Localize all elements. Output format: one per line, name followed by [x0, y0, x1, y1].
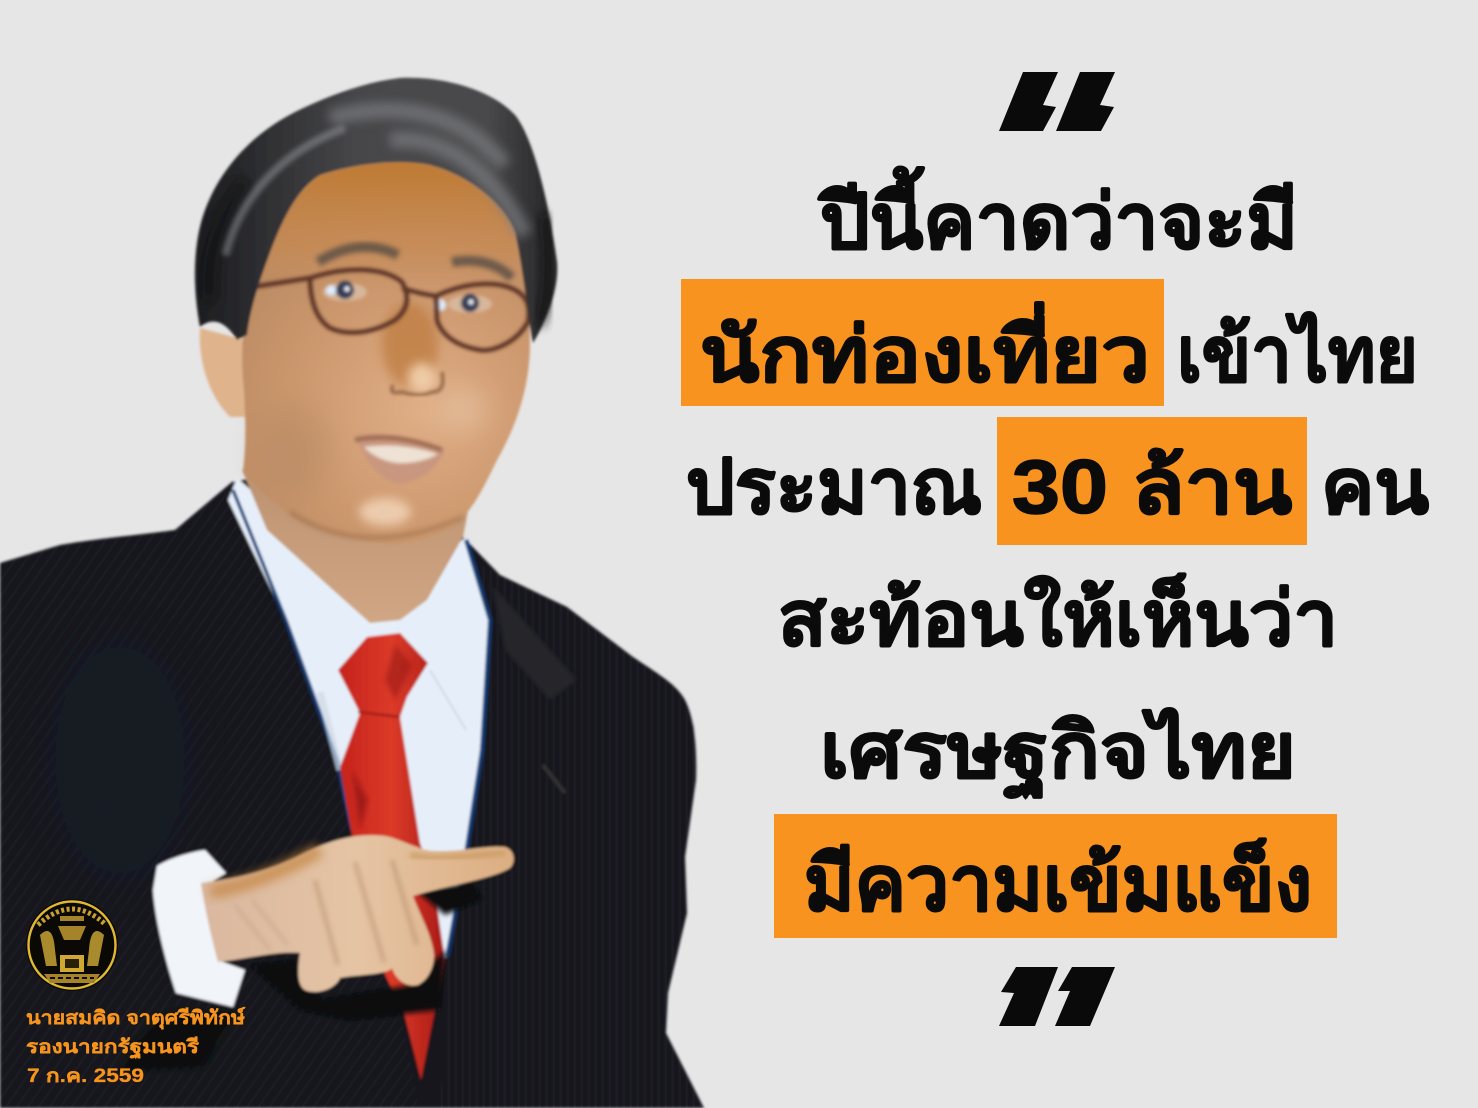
closing quotation mark	[999, 967, 1115, 1026]
highlight: tourists: นักท่องเที่ยว	[700, 301, 1150, 398]
highlight: is strong	[774, 814, 1337, 938]
photo: man in suit pointing	[0, 78, 704, 1108]
quote line 3 start: ประมาณ	[686, 445, 982, 530]
ear	[200, 328, 247, 417]
government seal	[26, 899, 118, 991]
necktie	[338, 633, 445, 1080]
highlight: 30 million: 30 ล้าน	[1012, 445, 1292, 530]
neck	[242, 440, 470, 623]
quote line 5: เศรษฐกิจไทย	[820, 707, 1296, 800]
highlight: 30 million	[997, 417, 1307, 545]
mouth	[355, 434, 445, 484]
attribution: 7 ก.ค. 2559	[27, 1066, 144, 1087]
eyebrows	[318, 247, 512, 278]
highlight: tourists	[681, 279, 1164, 406]
attribution: รองนายกรัฐมนตรี	[26, 1036, 200, 1060]
hair	[195, 78, 557, 343]
nose	[392, 372, 443, 395]
jacket	[0, 470, 704, 1108]
attribution: นายสมคิด จาตุศรีพิทักษ์	[26, 1007, 246, 1030]
glasses	[252, 270, 529, 350]
attribution	[26, 1007, 246, 1087]
quote line 1: ปีนี้คาดว่าจะมี	[817, 166, 1298, 265]
pointing hand	[201, 835, 514, 992]
face	[242, 162, 530, 544]
quote line 2 end: เข้าไทย	[1177, 311, 1418, 398]
hand shadow	[250, 950, 445, 1020]
quote line 4: สะท้อนให้เห็นว่า	[778, 573, 1338, 662]
eyes	[323, 281, 492, 313]
shirt cuff	[153, 850, 245, 1007]
highlight: is strong: มีความเข้มแข็ง	[804, 838, 1312, 927]
quote line 3 end: คน	[1321, 445, 1429, 530]
shirt and collar	[228, 478, 490, 960]
opening quotation mark	[999, 72, 1115, 131]
